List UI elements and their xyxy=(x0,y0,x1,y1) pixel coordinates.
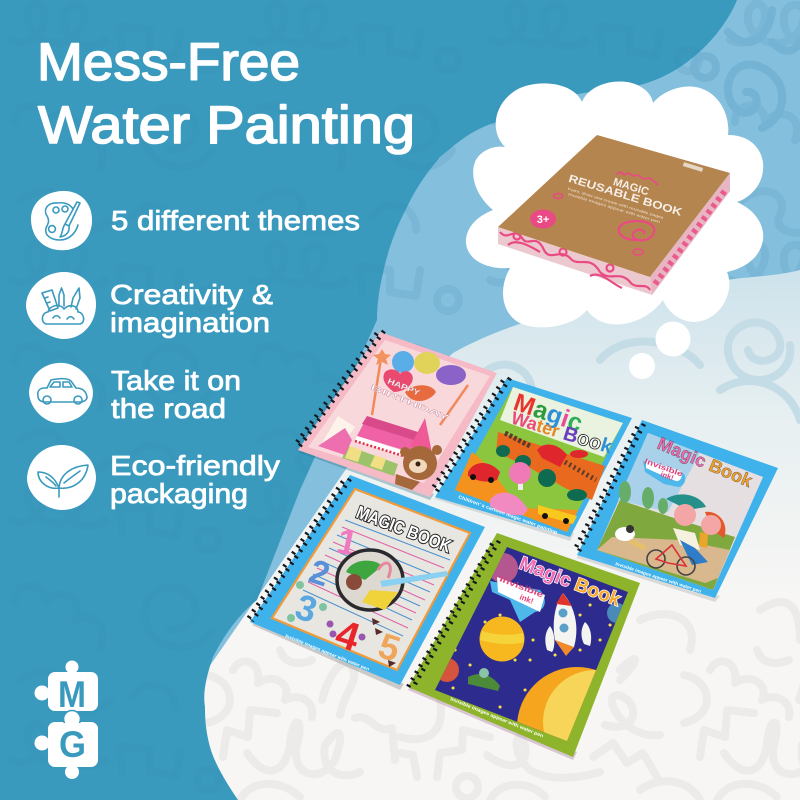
invisible ink badge: ink! xyxy=(659,469,675,482)
numbers xyxy=(291,520,405,670)
large planet xyxy=(517,667,596,741)
product box xyxy=(498,135,730,295)
invisible ink badge: ink! xyxy=(518,592,535,606)
numbers: 3 xyxy=(291,586,322,631)
water pen xyxy=(380,571,448,587)
sky xyxy=(500,387,623,457)
book cover xyxy=(435,378,632,537)
book cover xyxy=(298,332,497,497)
footer text: Invisible images appear with water pen xyxy=(615,561,702,594)
feature: 5 different themes xyxy=(31,191,360,250)
green hill xyxy=(597,500,735,590)
logo: MG puzzle pieces: G xyxy=(59,724,86,765)
label: the road xyxy=(111,393,226,424)
magnifier reveal xyxy=(337,550,403,610)
thought cloud xyxy=(466,81,763,379)
box title: MAGIC xyxy=(612,176,650,198)
feature: eco-friendly packaging xyxy=(27,445,280,510)
label xyxy=(110,450,280,509)
sky xyxy=(597,433,763,590)
vehicles xyxy=(468,445,588,524)
title: Magic Book xyxy=(654,433,756,492)
label xyxy=(110,279,273,338)
label: packaging xyxy=(110,478,248,509)
feature: take it on the road xyxy=(29,363,241,424)
numbers: 1 xyxy=(333,520,361,564)
box decorations xyxy=(616,172,658,185)
balloons xyxy=(372,349,468,425)
invisible ink badge xyxy=(490,574,545,622)
book shadow xyxy=(298,450,434,500)
box title: REUSABLE BOOK xyxy=(567,173,683,219)
numbers: 4 xyxy=(330,612,366,661)
background: bottom squiggle pattern xyxy=(207,602,800,800)
label: Take it on xyxy=(111,365,241,396)
book shadow xyxy=(408,684,577,760)
box top face xyxy=(498,135,730,277)
orange bridge xyxy=(496,432,605,500)
background: pale lower region xyxy=(200,270,800,800)
orange frame xyxy=(272,489,470,670)
blue planet xyxy=(607,603,623,623)
box side faces xyxy=(498,227,652,295)
label: 5 different themes xyxy=(111,205,360,236)
book cover xyxy=(577,420,778,598)
children xyxy=(666,494,725,565)
left planet xyxy=(440,658,459,682)
icon: leaves xyxy=(27,445,96,510)
bicycle xyxy=(647,545,695,575)
invisible ink badge: Invisible xyxy=(643,456,684,479)
feature: creativity and imagination xyxy=(26,272,273,339)
title: Water xyxy=(509,408,562,441)
icon: palette and brush xyxy=(31,191,92,250)
logo: MG puzzle pieces: M xyxy=(58,674,86,715)
thought bubble dots xyxy=(629,322,690,379)
background: light blue spiral xyxy=(694,10,800,128)
tan path xyxy=(597,537,730,583)
title: Magic xyxy=(510,388,586,438)
pink planet xyxy=(492,553,518,582)
teddy bear xyxy=(395,445,442,490)
label: Eco-friendly xyxy=(110,450,280,481)
logo: MG puzzle pieces xyxy=(34,660,98,779)
book shadow xyxy=(577,550,720,602)
orange road xyxy=(455,452,578,532)
numbers: 5 xyxy=(374,625,405,670)
cover art base xyxy=(455,387,623,532)
icon: car xyxy=(29,363,93,423)
number dots xyxy=(287,581,396,667)
title: Book xyxy=(561,423,616,459)
navy cover art xyxy=(435,547,628,741)
gifts xyxy=(318,416,398,476)
bridge rails xyxy=(565,462,596,480)
striped yellow planet xyxy=(480,616,524,662)
box title: Paint, draw and create with reusable pages xyxy=(567,187,664,220)
numbers: 2 xyxy=(305,552,334,594)
pink tree xyxy=(509,462,531,490)
spiral bindings xyxy=(248,329,644,689)
ufo xyxy=(468,668,500,691)
title: Water Painting xyxy=(38,96,415,155)
title: Magic Book xyxy=(516,553,624,611)
stars xyxy=(453,605,610,707)
book: space magic book xyxy=(408,533,640,760)
box title xyxy=(564,163,686,229)
label xyxy=(111,365,241,424)
book shadow xyxy=(252,620,404,690)
title: Mess-Free xyxy=(37,33,300,92)
book: happy birthday xyxy=(298,332,497,500)
invisible ink badge: Invisible xyxy=(498,574,545,600)
invisible ink badge xyxy=(643,456,685,487)
book: magic water book xyxy=(435,378,632,541)
book shadow xyxy=(435,490,574,541)
rockets xyxy=(545,593,591,656)
banner text: HAPPY xyxy=(386,377,422,398)
footer text: Invisible images appear with water pen xyxy=(450,696,544,738)
background: pale upper squiggle pattern xyxy=(480,322,800,420)
box title: Invisible images appear with water pen xyxy=(568,192,661,224)
cake xyxy=(355,416,432,458)
label: Creativity & xyxy=(110,279,273,310)
banner text xyxy=(369,377,451,422)
book: magic book numbers xyxy=(250,475,485,690)
product box: 3+ xyxy=(537,214,549,226)
banner text: BIRTHDAY xyxy=(369,383,451,422)
book: invisible ink bike xyxy=(577,420,778,602)
label: imagination xyxy=(110,307,270,338)
title: MAGIC BOOK xyxy=(354,502,454,557)
trees xyxy=(619,481,668,514)
footer text: Children' s cartoon magic water painting xyxy=(458,494,558,535)
background: light blue tile pattern xyxy=(0,0,800,400)
footer text: Invisible images appear with water pen xyxy=(285,633,370,672)
book cover xyxy=(250,475,485,685)
dog xyxy=(615,525,645,548)
title xyxy=(509,388,616,459)
icon: art tools and cloud xyxy=(26,272,96,339)
book cover xyxy=(408,533,640,757)
title xyxy=(37,33,415,155)
ruled lines xyxy=(303,520,450,636)
